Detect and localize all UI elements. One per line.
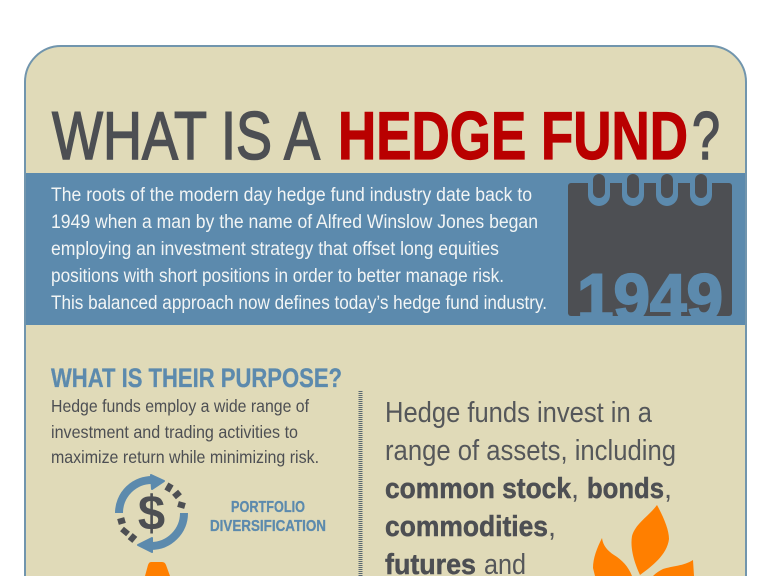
text block: hedge fund history: employing an investment strategy that offset long equities [51,239,499,260]
text block: hedge fund history: 1949 when a man by the name of Alfred Winslow Jones began [51,212,538,233]
text block: purpose description: maximize return while minimizing risk. [51,447,319,467]
title [52,98,720,174]
text block: hedge fund history: This balanced approach now defines today’s hedge fund industry. [51,293,547,314]
icon: 1949 calendar: 1949 [577,260,723,334]
text block: purpose description: investment and trading activities to [51,422,298,442]
text block: asset range: commodities [385,511,548,543]
text block: asset range: , [664,473,672,505]
title: WHAT IS A [52,98,321,174]
text block: asset range: Hedge funds invest in a [385,397,653,429]
text block: asset range: range of assets, including [385,435,676,467]
icon: orange shape, cropped [145,562,170,576]
divider [358,391,362,576]
text block: asset range: common stock [385,473,572,505]
title: ? [692,98,720,174]
heading: what is their purpose: WHAT IS THEIR PURPOSE? [51,363,342,393]
panel: blue history band [26,173,745,325]
text block: asset range: bonds [587,473,664,505]
text block: hedge fund history: positions with short positions in order to better manage risk. [51,266,504,287]
icon: portfolio diversification dollar cycle [118,475,185,552]
text block: purpose description [51,396,319,467]
text block: asset range [385,397,676,576]
text block: purpose description: Hedge funds employ a wide range of [51,396,309,416]
icon: orange leaves [593,505,694,576]
label: portfolio diversification: DIVERSIFICATION [210,518,326,535]
icon: 1949 calendar [568,174,732,316]
text block: asset range: , [571,473,579,505]
icon: portfolio diversification dollar cycle: $ [138,487,165,541]
label: portfolio diversification [210,499,326,535]
text block: hedge fund history [51,185,547,314]
label: portfolio diversification: PORTFOLIO [231,499,305,516]
text block: asset range: , [548,511,556,543]
text block: hedge fund history: The roots of the modern day hedge fund industry date back to [51,185,532,206]
